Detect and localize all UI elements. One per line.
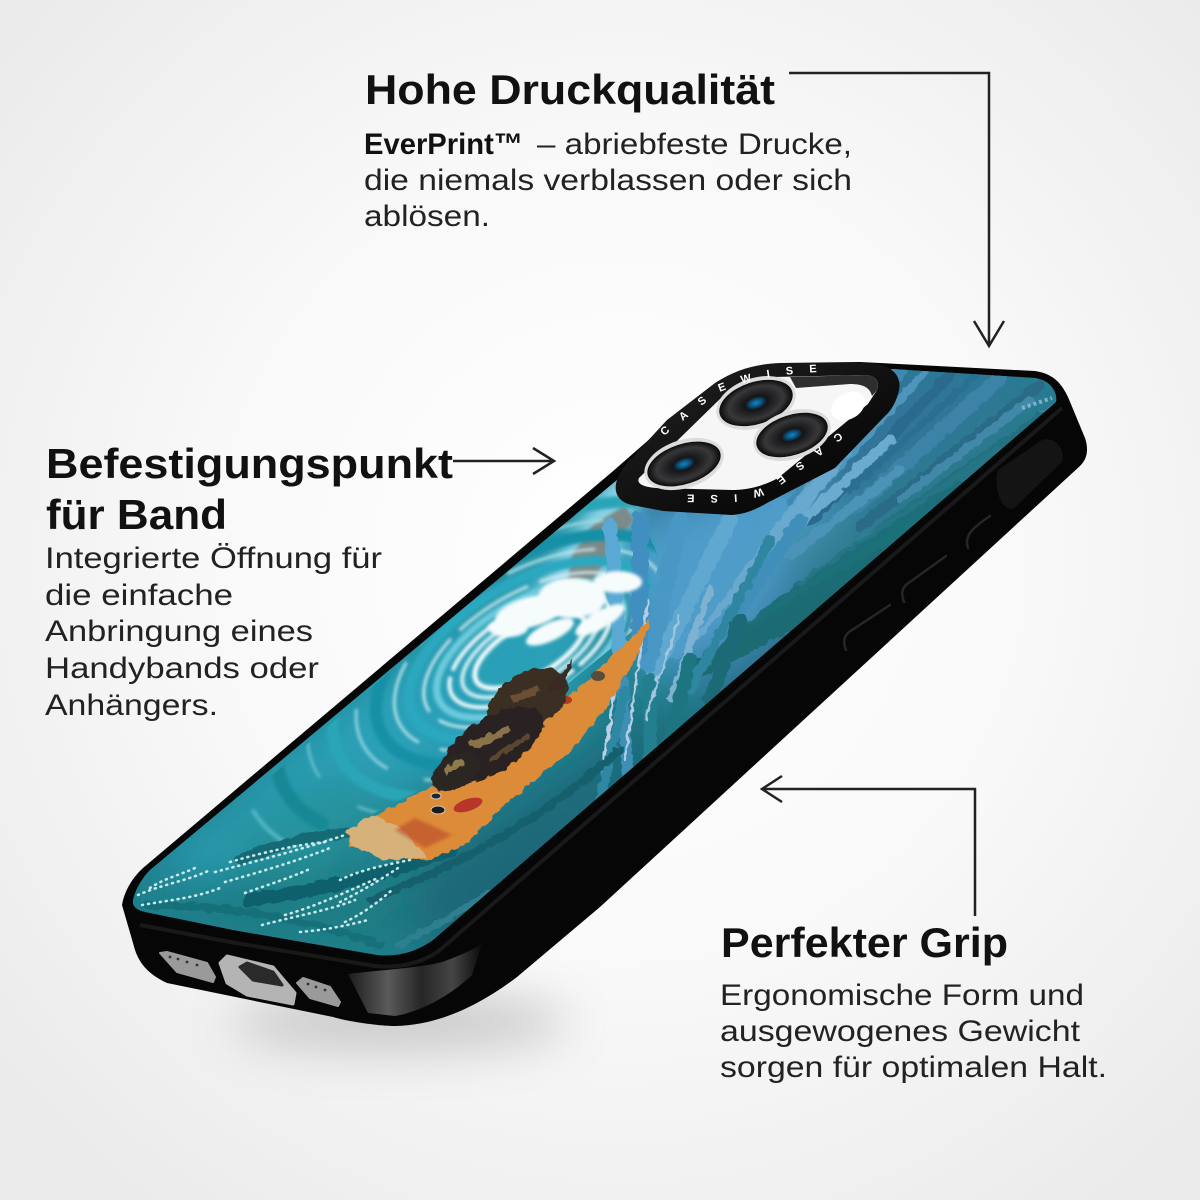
lens top <box>709 367 803 439</box>
ring brand text: CASEWISE <box>688 434 842 503</box>
window inner shade <box>790 375 878 396</box>
heading: strap point <box>46 440 453 538</box>
camera window <box>638 375 878 490</box>
heading: grip: Perfekter Grip <box>721 919 1008 966</box>
body: print quality <box>364 128 852 233</box>
wave rays <box>600 370 1056 800</box>
body: strap point: Anhängers. <box>45 689 218 722</box>
lens left <box>638 429 730 499</box>
sea foam crest <box>488 571 642 651</box>
phone drop shadow <box>230 992 570 1052</box>
phone case <box>122 362 1088 1026</box>
pizza surfboard <box>346 619 651 860</box>
heading: strap point: Befestigungspunkt <box>46 440 453 487</box>
case body <box>122 362 1087 1026</box>
heading: strap point: für Band <box>46 491 227 538</box>
body: strap point: die einfache <box>45 579 233 612</box>
ring brand text <box>660 364 842 503</box>
camera ring <box>616 363 900 515</box>
water bubbles <box>138 835 410 932</box>
body: strap point: Anbringung eines <box>45 615 313 648</box>
body: strap point <box>45 542 382 722</box>
arrow: print quality <box>789 73 1004 346</box>
lens right <box>747 400 837 470</box>
body: print quality: – abriebfeste Drucke, <box>537 128 852 161</box>
speaker holes <box>169 956 326 991</box>
sky and mountain <box>530 470 640 600</box>
side buttons <box>844 516 990 650</box>
body: grip: sorgen für optimalen Halt. <box>720 1051 1107 1084</box>
lower water streaks <box>140 746 624 950</box>
speaker right <box>297 978 340 1006</box>
swirl rings <box>250 494 658 849</box>
arrow: strap point <box>453 448 554 474</box>
case gloss corner <box>348 944 482 1016</box>
body: grip: ausgewogenes Gewicht <box>720 1015 1081 1048</box>
charging port <box>220 956 295 1004</box>
strap slot <box>996 439 1063 509</box>
distant speckle top right <box>1022 398 1052 408</box>
text block: grip <box>720 919 1107 1084</box>
text block: print quality <box>364 66 852 233</box>
body: print quality: die niemals verblassen oder sich <box>364 164 852 197</box>
heading: print quality: Hohe Druckqualität <box>365 66 775 113</box>
sloth on pizza <box>430 658 573 792</box>
arrow: grip <box>762 776 975 916</box>
body: grip <box>720 979 1107 1084</box>
body: print quality: ablösen. <box>364 200 490 233</box>
text block: strap point <box>45 440 453 722</box>
body: grip: Ergonomische Form und <box>720 979 1084 1012</box>
body: strap point: Integrierte Öffnung für <box>45 542 382 575</box>
speaker left <box>160 952 215 982</box>
ring brand text: CASEWISE <box>660 364 816 434</box>
body: strap point: Handybands oder <box>45 652 319 685</box>
printed artwork: wave <box>120 347 1080 970</box>
body: print quality: EverPrint™ <box>364 128 523 161</box>
camera module <box>616 363 900 515</box>
case rim highlight <box>140 408 1062 967</box>
flash <box>826 386 870 426</box>
